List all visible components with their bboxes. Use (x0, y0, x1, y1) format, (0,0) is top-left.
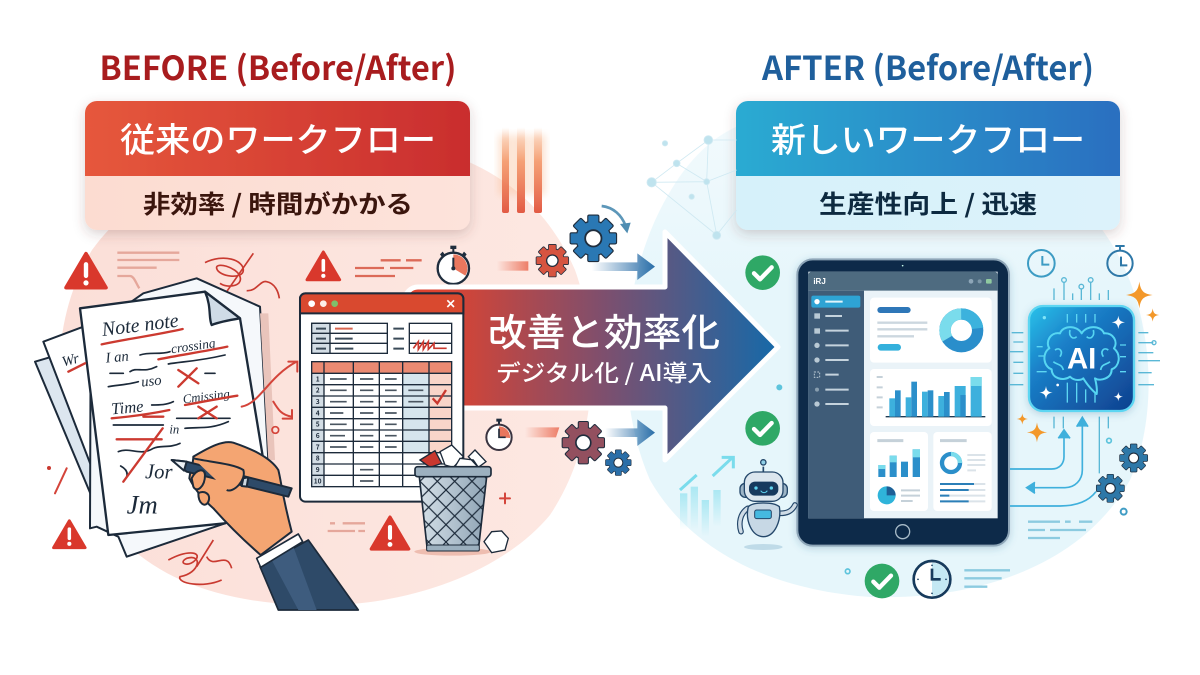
icon: trash can (414, 445, 491, 556)
small dots (776, 384, 1127, 574)
note lines: bottom (328, 523, 365, 531)
red decorations (55, 362, 510, 503)
growth arrows (680, 457, 733, 537)
icon: check top (745, 255, 780, 290)
text lines: tablet right (1028, 522, 1092, 538)
note lines: top left (117, 253, 179, 288)
icon: warning top middle (307, 252, 340, 280)
gear: small blue (606, 450, 631, 475)
title: before: BEFORE (Before/After) (100, 42, 456, 90)
window: spreadsheet (300, 293, 463, 502)
clock: small (1028, 250, 1055, 277)
motion bars (499, 127, 545, 213)
main page (80, 292, 263, 535)
gear: red-blue (563, 422, 604, 463)
lower small arrow (605, 419, 655, 446)
window: main table: 10 (314, 475, 322, 485)
window: main table: 9 (316, 464, 320, 474)
back paper sheets (35, 278, 275, 557)
card: bar chart (870, 369, 992, 426)
central arrow: デジタル化 / AI導入 (496, 354, 712, 388)
panel: after header: 新しいワークフロー (771, 113, 1085, 162)
circuit lines around chip (1009, 278, 1160, 473)
window: main table: 3 (316, 396, 320, 406)
icon: check bottom (865, 564, 899, 598)
AI chip (1029, 306, 1134, 411)
gear: orange (536, 245, 568, 276)
icon: warning bottom middle (371, 517, 409, 549)
background blob: before (60, 140, 591, 605)
handwriting: Jm (127, 489, 158, 519)
gear: right lower (1097, 475, 1124, 502)
window: main table: 7 (316, 441, 320, 451)
card: donut and progress (933, 432, 992, 511)
AI chip: AI (1067, 343, 1096, 376)
suit sleeve (257, 534, 358, 610)
scribble bottom (168, 540, 232, 584)
window: main table: 2 (316, 385, 320, 395)
central arrow (405, 232, 778, 460)
back sheet writing: Wr (60, 351, 81, 371)
handwriting: Jor (145, 461, 173, 483)
icon: warning bottom left (53, 521, 85, 548)
window: main table: 5 (316, 419, 320, 429)
curved arrow (602, 206, 631, 233)
network graph (647, 136, 737, 239)
icon: check middle (745, 411, 780, 446)
tablet (797, 259, 1009, 546)
tablet: iRJ (813, 277, 826, 286)
illustration: before scene (35, 252, 510, 610)
panel: after header: 生産性向上 / 迅速 (819, 185, 1037, 221)
stopwatch: small (1107, 246, 1133, 276)
window: main table: 8 (316, 453, 320, 463)
handwriting: in (169, 422, 179, 436)
window: main table: 4 (316, 407, 320, 417)
tablet sidebar (811, 296, 860, 407)
hand with pen (172, 442, 292, 555)
flow arrows (1010, 417, 1096, 506)
crumpled paper (484, 531, 508, 553)
clock: large (914, 561, 950, 598)
stopwatch: upper (438, 246, 469, 284)
panel: before header: 従来のワークフロー (120, 113, 436, 162)
scribble top (205, 253, 279, 298)
card: small bars and pie (870, 432, 928, 511)
handwriting: uso (140, 373, 162, 391)
upper red dash (497, 261, 528, 271)
illustration: after scene (680, 246, 1160, 598)
upper small arrow (592, 253, 655, 280)
sparkles: orange (1017, 282, 1159, 442)
transition icons: gears and small arrows (438, 206, 655, 475)
window: main table: 1 (316, 373, 320, 383)
note lines: top middle (355, 260, 422, 276)
text lines: bottom (964, 570, 1010, 587)
gear: blue (571, 216, 616, 261)
stopwatch: lower (486, 419, 512, 450)
panel: after header (736, 101, 1120, 230)
gear: right upper (1120, 444, 1147, 472)
card: summary donut (870, 298, 992, 363)
background blob: after (627, 123, 1149, 597)
panel: before header (85, 101, 470, 230)
icon: warning top left (66, 254, 106, 288)
window: main table: 6 (316, 430, 320, 440)
handwriting (68, 310, 237, 519)
handwriting: crossing (170, 335, 217, 356)
central arrow: 改善と効率化 (488, 302, 720, 357)
small dots (47, 427, 279, 470)
handwriting: Note note (100, 310, 180, 341)
panel: before header: 非効率 / 時間がかかる (143, 185, 413, 221)
window: main table (312, 362, 452, 487)
handwriting: I an (104, 349, 129, 367)
title: after: AFTER (Before/After) (761, 42, 1094, 90)
handwriting: Cmissing (182, 387, 230, 406)
lower red dash (525, 427, 559, 437)
robot (740, 460, 795, 550)
handwriting: Time (110, 397, 145, 418)
